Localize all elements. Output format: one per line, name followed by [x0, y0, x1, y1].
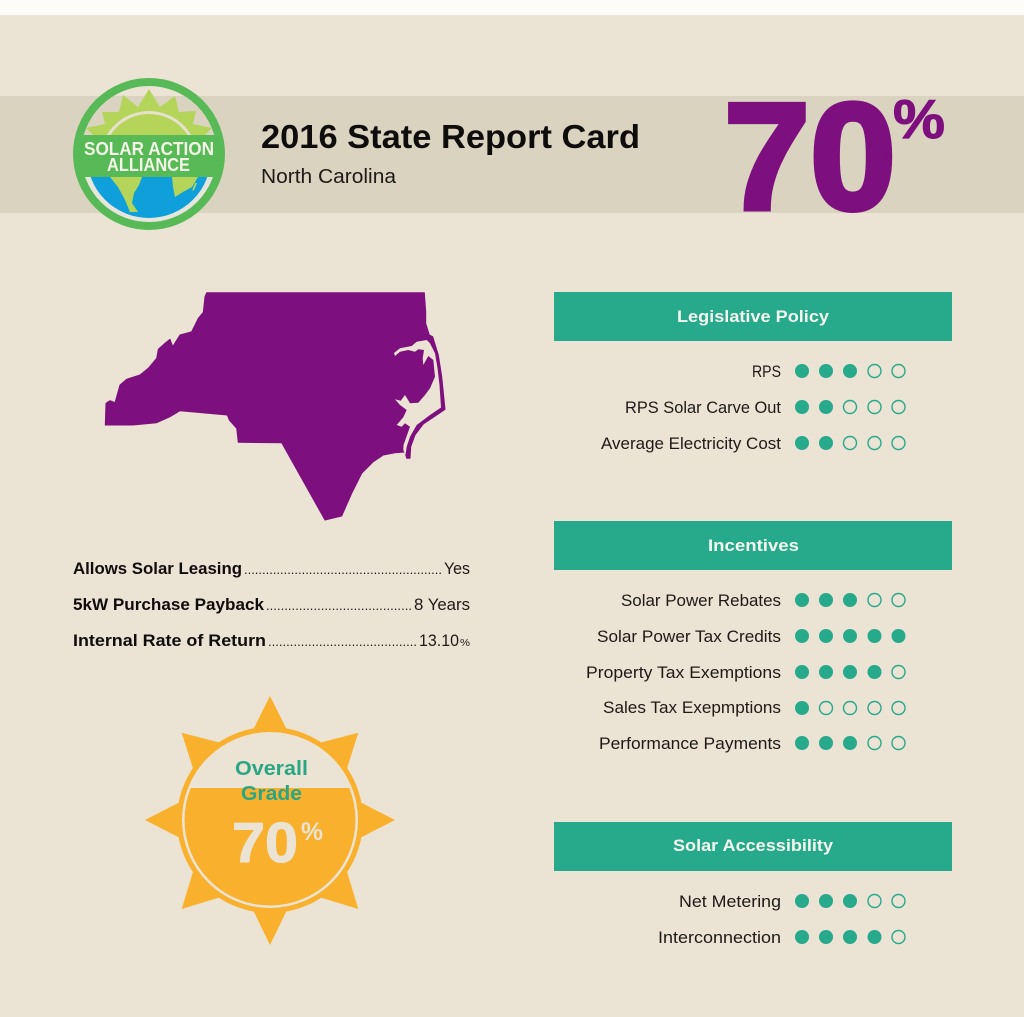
row: net metering: Net Metering	[679, 893, 781, 911]
grade dial	[177, 727, 363, 913]
big score: 70	[724, 72, 896, 242]
row: solar power tax credits	[597, 628, 906, 646]
stat: internal rate of return	[73, 631, 470, 650]
heading: legislative policy: Legislative Policy	[677, 307, 830, 326]
stat: solar leasing: Allows Solar Leasing	[73, 559, 242, 578]
stat: purchase payback	[73, 595, 470, 614]
icon: earth	[85, 177, 213, 222]
logo banner	[81, 135, 217, 177]
stat: purchase payback: 5kW Purchase Payback	[73, 595, 265, 614]
row: property tax exemptions: Property Tax Exemptions	[586, 664, 781, 682]
row: RPS solar carve out: RPS Solar Carve Out	[625, 399, 781, 417]
stat: internal rate of return: .........................................	[268, 634, 417, 649]
header band	[0, 96, 1024, 213]
logo: Solar Action Alliance	[73, 82, 225, 230]
heading: incentives	[554, 521, 952, 570]
panel: legislative policy	[554, 292, 952, 453]
map: sounds and inlets	[394, 340, 441, 455]
stats list	[73, 559, 470, 650]
row: RPS solar carve out	[625, 399, 905, 417]
heading: solar accessibility: Solar Accessibility	[673, 836, 834, 855]
stat: internal rate of return: %	[460, 638, 470, 649]
row: performance payments: Performance Payments	[599, 735, 781, 753]
logo banner: SOLAR ACTION	[84, 139, 214, 159]
grade label: Overall	[235, 758, 308, 780]
row: performance payments	[599, 735, 905, 753]
row: RPS	[752, 363, 905, 381]
panel: solar accessibility	[554, 822, 952, 947]
row: net metering	[679, 893, 905, 911]
title: 2016 State Report Card	[261, 118, 640, 155]
logo ring	[77, 82, 221, 226]
logo banner: ALLIANCE	[107, 155, 190, 175]
row: RPS: RPS	[752, 363, 781, 381]
row: interconnection	[658, 929, 905, 947]
row: average electricity cost	[601, 435, 905, 453]
row: interconnection: Interconnection	[658, 929, 781, 947]
subtitle: state name: North Carolina	[261, 166, 397, 188]
stat: internal rate of return: Internal Rate of Return	[73, 631, 266, 650]
stat: solar leasing: .......................................................	[244, 562, 442, 577]
icon: sun rays	[86, 89, 212, 135]
big score: %	[893, 88, 945, 150]
grade value	[232, 811, 323, 875]
row: solar power rebates: Solar Power Rebates	[621, 592, 781, 610]
stat: solar leasing	[73, 559, 470, 578]
row: property tax exemptions	[586, 664, 905, 682]
grade label: Grade	[241, 783, 302, 805]
row: average electricity cost: Average Electricity Cost	[601, 435, 781, 453]
map: North Carolina	[105, 293, 445, 520]
heading: incentives: Incentives	[708, 536, 799, 555]
grade label	[235, 758, 308, 805]
icon: sun rays	[145, 696, 395, 945]
heading: legislative policy	[554, 292, 952, 341]
row: solar power rebates	[621, 592, 905, 610]
stat: internal rate of return: 13.10	[419, 631, 459, 650]
row: sales tax exemptions: Sales Tax Exepmptions	[603, 699, 781, 717]
stat: purchase payback: 8 Years	[414, 595, 470, 614]
stat: purchase payback: ........................................	[266, 598, 412, 613]
grade value: %	[301, 818, 323, 846]
grade value: 70	[232, 811, 298, 875]
panel: incentives	[554, 521, 952, 753]
heading: solar accessibility	[554, 822, 952, 871]
overall grade sun	[145, 696, 395, 945]
row: solar power tax credits: Solar Power Tax Credits	[597, 628, 781, 646]
stat: solar leasing: Yes	[444, 559, 470, 578]
row: sales tax exemptions	[603, 699, 905, 717]
